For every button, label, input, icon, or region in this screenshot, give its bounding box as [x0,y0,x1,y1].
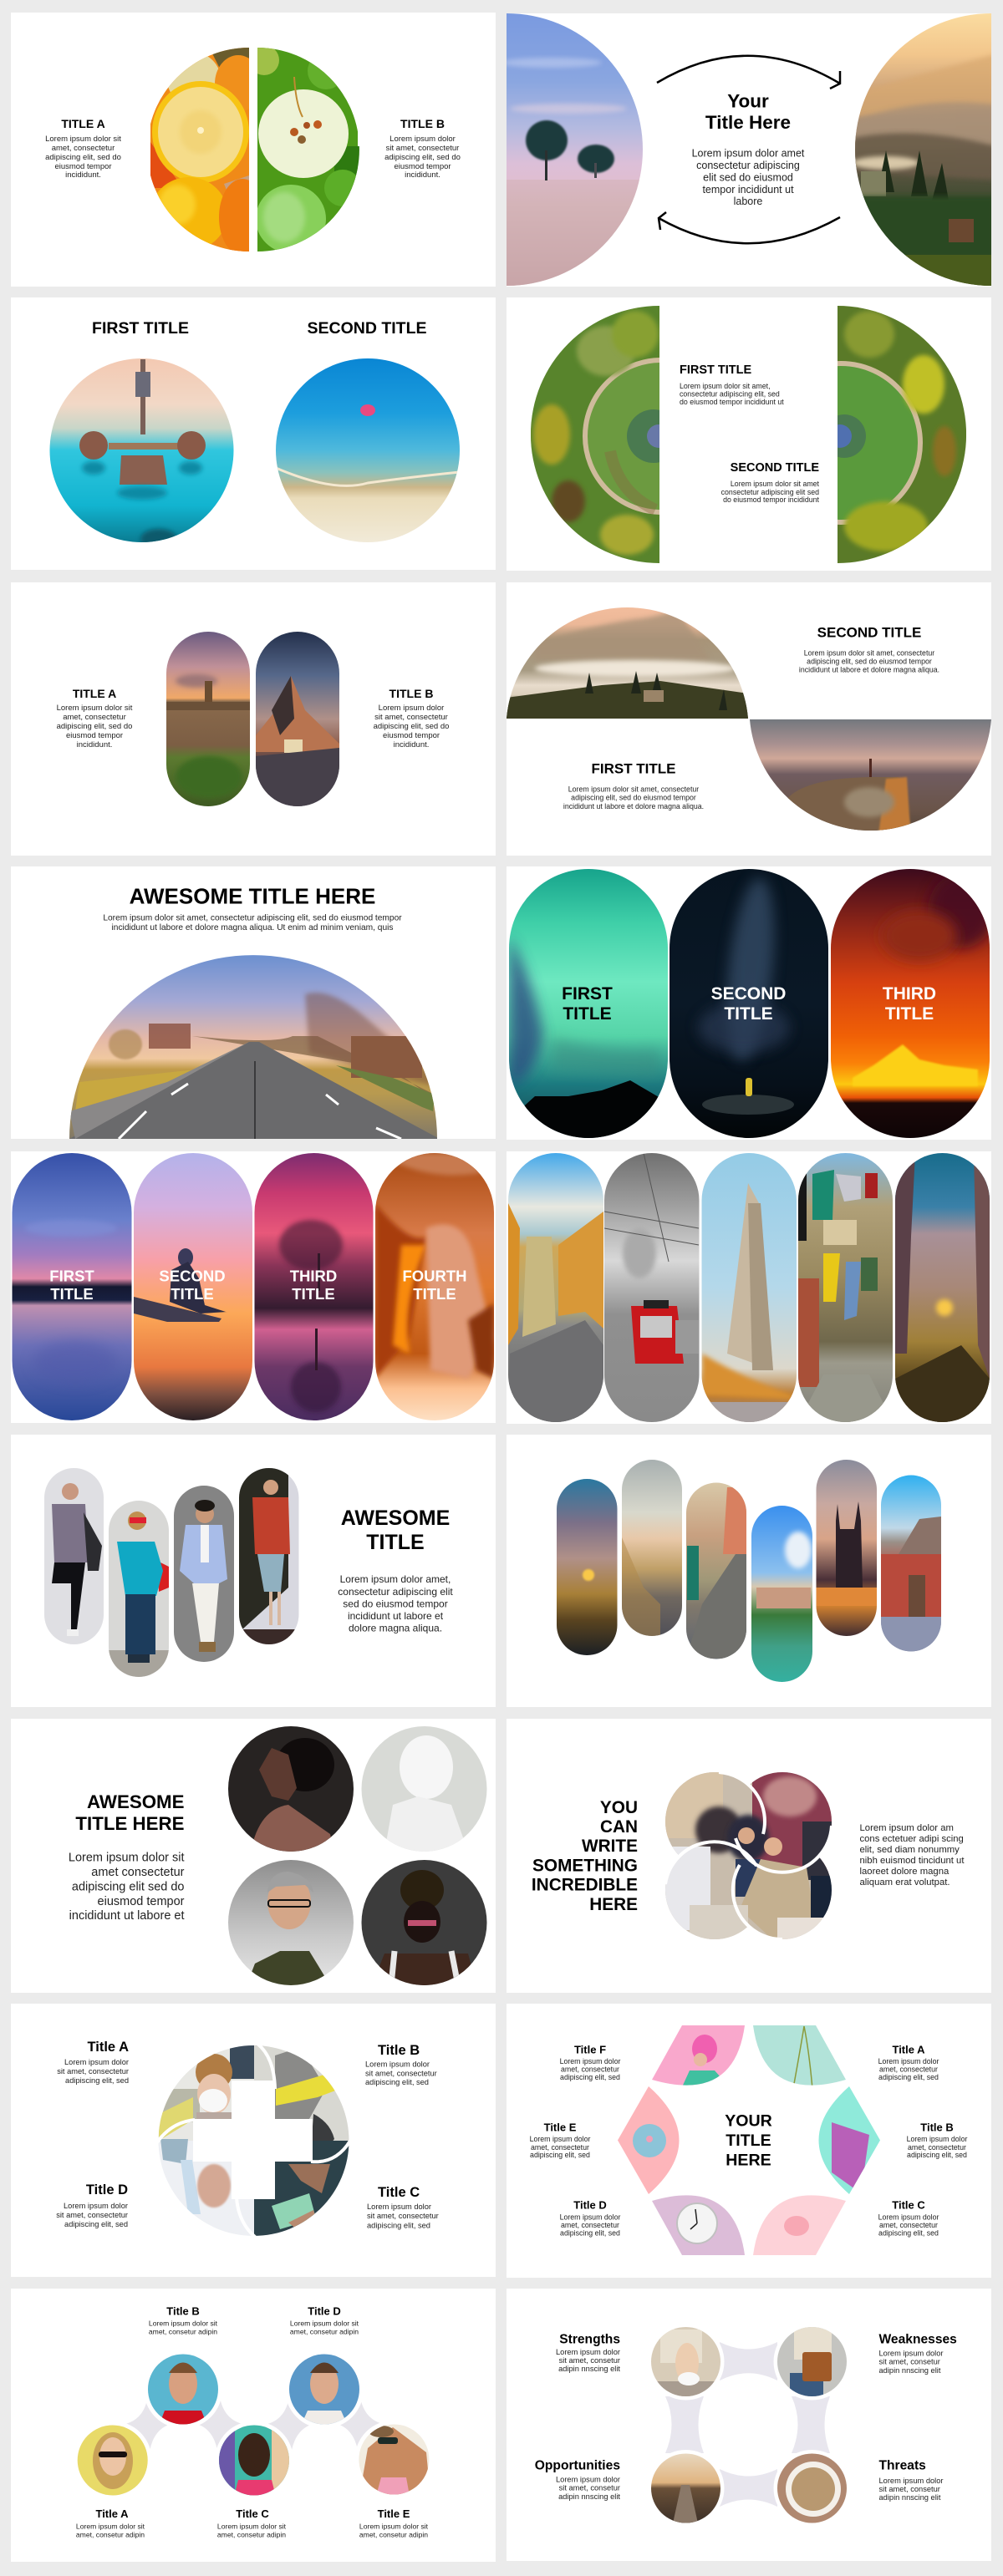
text: title A: Title A [892,2044,925,2055]
text: title B: Title B [920,2121,954,2134]
text: title A: amet, consetur adipin [76,2530,145,2538]
text: description: Lorem ipsum dolor sit amet, consectetur adipiscing elit, sed do eiusmod tempor [103,913,402,922]
text: title E: amet, consetur adipin [359,2530,428,2538]
heading: you can write something incredible here: HERE [589,1895,638,1913]
text: description: consectetur adipiscing elit [338,1586,453,1598]
text: description: amet consectetur [91,1866,185,1879]
text: weaknesses [879,2333,957,2375]
image: baby at window [650,2326,722,2398]
pill: canyon [375,1153,494,1420]
pill: cobbled street [508,1153,603,1422]
text: title A: eiusmod tempor [66,730,123,740]
heading: you can write something incredible here: WRITE [582,1837,638,1855]
text: title A: eiusmod tempor [54,162,112,170]
image: aerial park right half [838,306,966,563]
text: title D: sit amet, consectetur [56,2211,128,2219]
text: title A: amet, consectetur [52,144,115,152]
text: title A: adipiscing elit, sed [65,2076,129,2085]
text: cycle description [692,147,805,207]
text: title C: adipiscing elit, sed [878,2229,939,2238]
pill: old street [622,1460,682,1636]
heading: awesome title here: AWESOME [87,1791,184,1811]
text: second title [721,461,820,504]
panel: two beach circles [11,297,496,570]
text: title B: Lorem ipsum dolor [379,704,444,712]
image: citrus half circle [150,48,249,252]
text: title A: TITLE A [61,117,105,130]
text: title B [384,117,461,179]
text: title E [530,2121,590,2159]
heading: you can write something incredible here: YOU [600,1798,638,1816]
text: title B: Title B [166,2304,200,2318]
portrait: man B [147,2354,219,2426]
text: second title: do eiusmod tempor incididunt [723,495,820,504]
text: title D [56,2182,128,2228]
text: title C: Lorem ipsum dolor [878,2213,939,2221]
text: opportunities [535,2458,620,2501]
pill: red tram in grayscale [604,1153,699,1422]
labels: four titles [49,1267,467,1302]
text: weaknesses: Weaknesses [879,2333,957,2346]
image: coffee cup [776,2453,848,2523]
connectors: grey waisted bands [665,2342,830,2507]
decor: quadrant separators [157,2044,350,2238]
text: weaknesses: Lorem ipsum dolor [879,2350,943,2358]
panel: people pills [11,1435,496,1707]
heading: your title here: Title Here [705,112,791,132]
text: title B: Lorem ipsum dolor sit [149,2319,218,2328]
text: title B: Lorem ipsum dolor [365,2060,430,2069]
image: sunset lookout bowl [750,719,992,841]
text: cycle description: tempor incididunt ut [702,184,794,196]
heading: your title here: TITLE [726,2131,771,2150]
text: description: Lorem ipsum dolor sit [69,1852,184,1865]
text: title E: Lorem ipsum dolor [530,2135,590,2143]
heading: your title here: YOUR [725,2112,772,2131]
text: title B: adipiscing elit, sed [907,2151,967,2159]
pill: sitting silhouette [134,1153,252,1420]
portrait: white hair [361,1726,487,1852]
panel: four overlapping circles [507,1719,991,1993]
icon: white medical cross [193,2081,313,2199]
text: title F: adipiscing elit, sed [560,2073,620,2081]
text: title A: Title A [95,2507,129,2520]
image: four quadrants with white cross [158,2045,350,2237]
text: threats: adipin nnscing elit [879,2493,941,2502]
pill: flatiron [702,1153,797,1423]
text: title D: amet, consectetur [561,2221,619,2229]
text: title D: adipiscing elit, sed [64,2220,128,2228]
text: title A: Lorem ipsum dolor sit [76,2522,145,2530]
pill: aurora [509,869,669,1140]
text: title B: amet, consetur adipin [149,2328,217,2336]
text: title A: Lorem ipsum dolor sit [57,704,133,712]
text: title D: Title D [308,2304,341,2318]
rings: white halos [74,2350,433,2500]
text: title B: Lorem ipsum dolor [389,134,456,144]
text: title A [45,117,121,179]
text: description: incididunt ut labore et dolore magna aliqua. Ut enim ad minim veniam, quis [112,922,393,932]
text: title C: amet, consectetur [879,2221,938,2229]
text: second title: adipiscing elit, sed do eiusmod tempor [807,657,932,665]
panel: medical cross circle [11,2004,496,2277]
decor: white interlocking arcs [665,1772,832,1939]
text: title B: incididunt. [405,170,440,179]
panel: four pills [11,1151,496,1423]
arrow: top arc [657,56,840,89]
portrait: man D [288,2354,360,2426]
text: title E: amet, consectetur [531,2143,589,2152]
text: title D: Lorem ipsum dolor sit [290,2319,359,2328]
text: strengths: adipin nnscing elit [558,2365,620,2373]
text: title A [57,687,133,749]
heading: your title here: Your [727,90,769,111]
label: first title: TITLE [563,1004,612,1023]
panel: zigzag of portraits [11,2289,496,2562]
portrait: man with dreadlocks [361,1860,487,1985]
text: threats: sit amet, consetur [879,2485,940,2493]
text: title B: eiusmod tempor [383,730,440,740]
text: title B [149,2304,218,2336]
text: description: adipiscing elit sed do [72,1880,184,1893]
text: first title: do eiusmod tempor incididunt ut [680,398,784,406]
text: first title: Lorem ipsum dolor sit amet, [680,382,771,390]
text: first title: FIRST TITLE [591,760,676,777]
text: title B: TITLE B [400,117,445,130]
text: second title: SECOND TITLE [817,625,921,640]
heading: your title here [705,90,791,132]
image: misty field with trees [502,13,644,287]
text: title A: adipiscing elit, sed [878,2073,939,2081]
image: foggy hills dome [507,597,749,719]
text: title C: amet, consetur adipin [217,2530,286,2538]
text: first title: Lorem ipsum dolor sit amet, consectetur [568,785,699,794]
pill: tree reflection [254,1153,373,1420]
text: opportunities: Opportunities [535,2458,620,2473]
text: title B: sit amet, consectetur [365,2069,437,2077]
petal: lollipop plate [614,2081,685,2197]
pill: evening street [895,1153,990,1422]
panel: hexagon of petals [507,2004,991,2278]
text: title B: adipiscing elit, sed [365,2078,429,2086]
text: opportunities: Lorem ipsum dolor [556,2475,620,2483]
panel: cycle between two landscapes [502,13,995,288]
text: title B: sit amet, consectetur [386,144,459,152]
text: title A: incididunt. [65,170,101,179]
text: title A: Lorem ipsum dolor [64,2058,129,2066]
heading: you can write something incredible here: SOMETHING [532,1856,638,1875]
petal: building [815,2081,886,2197]
pill: venice [751,1506,812,1682]
text: title C: Title C [892,2199,925,2211]
text: strengths: Strengths [559,2333,620,2346]
text: threats: Lorem ipsum dolor [879,2477,943,2485]
text: threats [879,2458,943,2502]
text: second title: SECOND TITLE [731,461,819,475]
text: title D: Lorem ipsum dolor [560,2213,620,2221]
text: title D [290,2304,359,2336]
text: title A: sit amet, consectetur [57,2067,129,2076]
pill: lake dusk [12,1153,132,1420]
text: title B: TITLE B [389,687,433,700]
rings: white halos [647,2323,851,2527]
text: title D [560,2199,620,2238]
text: title D: adipiscing elit, sed [560,2229,620,2238]
text: weaknesses: sit amet, consetur [879,2358,940,2366]
labels: four titles: TITLE [171,1285,214,1302]
pill: lava [831,869,995,1138]
text: cycle description: consectetur adipiscing [696,160,800,171]
panel: split park aerial [507,297,991,571]
text: opportunities: sit amet, consetur [559,2483,620,2492]
text: description: sed do eiusmod tempor [343,1598,448,1609]
heading: first title: FIRST TITLE [92,319,189,338]
labels: four titles: TITLE [50,1285,94,1302]
text: description: Lorem ipsum dolor am [859,1823,954,1833]
panel: citrus and apple half circles [11,13,496,287]
image: man with leather bag [776,2326,848,2398]
text: strengths [556,2333,620,2373]
portrait: man C [218,2425,292,2497]
pill: milky way night [670,869,828,1138]
text: title B: sit amet, consectetur [374,712,448,722]
text: cycle description: labore [734,196,762,207]
text: title A: amet, consectetur [63,712,126,722]
heading: awesome title here: AWESOME TITLE HERE [130,884,375,909]
portrait: man with glasses [228,1860,354,1985]
text: title B [907,2121,967,2159]
labels: four titles: FIRST [49,1267,94,1284]
text: second title: Lorem ipsum dolor sit amet, consectetur [804,648,934,657]
text: title B: Lorem ipsum dolor [907,2135,967,2143]
text: title E: adipiscing elit, sed [530,2151,590,2159]
pill: man with backpack [44,1468,104,1644]
connectors: grey stars [125,2390,383,2463]
text: title F: Title F [574,2044,606,2055]
text: description [103,913,402,932]
heading: you can write something incredible here: INCREDIBLE [532,1875,638,1894]
text: title A: Title A [87,2040,129,2055]
text: title A [57,2040,129,2085]
text: threats: Threats [879,2458,926,2473]
text: title E: Title E [544,2121,577,2134]
labels: four titles: TITLE [292,1285,335,1302]
text: first title [680,363,784,406]
heading: your title here: HERE [726,2151,771,2169]
text: title E: Lorem ipsum dolor sit [359,2522,429,2530]
pill: laundry alley [798,1153,893,1422]
pill: stairs [686,1482,746,1659]
text: title C: Title C [378,2185,420,2200]
panel: three pills [507,866,995,1140]
text: title B [365,2043,437,2086]
text: title D: Lorem ipsum dolor [64,2202,128,2210]
text: title B [374,687,449,749]
text: title C: sit amet, consectetur [367,2212,439,2220]
portrait: woman in profile [228,1726,354,1852]
labels: four titles: SECOND [159,1267,226,1284]
label: third title: TITLE [885,1004,934,1023]
image: railway at sunset [650,2453,722,2523]
text: title C [367,2185,439,2229]
panel: road dome [11,866,496,1140]
text: title C [878,2199,939,2238]
panel: two pill landscapes [11,582,496,856]
heading: awesome title: TITLE [366,1531,425,1554]
text: title A: Lorem ipsum dolor sit [45,134,121,144]
heading: awesome title: AWESOME [341,1506,450,1530]
text: title B: adipiscing elit, sed do [374,722,449,730]
text: cycle description: Lorem ipsum dolor amet [692,147,805,159]
petal: clock [648,2172,748,2260]
text: first title: consectetur adipiscing elit, sed [680,389,780,398]
text: title C: Title C [236,2507,269,2520]
text: description: dolore magna aliqua. [349,1623,442,1634]
text: title C: Lorem ipsum dolor sit [217,2522,287,2530]
text: weaknesses: adipin nnscing elit [879,2366,941,2375]
pill: evening street [557,1479,617,1655]
text: description: incididunt ut labore et [348,1610,444,1622]
pill: man in blue blazer [174,1486,234,1662]
text: title A: Lorem ipsum dolor [878,2057,939,2065]
text: title F [560,2044,620,2081]
labels: four titles: TITLE [413,1285,456,1302]
text: first title: incididunt ut labore et dolore magna aliqua. [563,802,704,810]
text: title A: TITLE A [73,687,116,700]
text: second title: incididunt ut labore et dolore magna aliqua. [799,665,939,673]
text: title D: Title D [573,2199,607,2211]
text: title F: amet, consectetur [561,2065,619,2074]
heading: second title: SECOND TITLE [307,319,427,338]
pill: woman in red sweater [239,1468,299,1644]
image: town on rock at sunset [166,632,250,806]
text: description: aliquam erat volutpat. [859,1877,950,1888]
labels: four titles: FOURTH [402,1267,467,1284]
text: description: eiusmod tempor [98,1895,185,1908]
image: green apple half circle [257,48,359,252]
text: title A: incididunt. [77,740,112,749]
panel: five city pills [507,1151,991,1424]
text: title B: adipiscing elit, sed do [384,152,461,162]
panel: two half circles [507,582,992,856]
petal: lips [748,2172,848,2260]
text: first title: adipiscing elit, sed do eiusmod tempor [571,794,696,802]
text: title D: amet, consetur adipin [290,2328,359,2336]
pill: prague cathedral [816,1460,878,1636]
arrow: bottom arc [659,212,840,243]
text: description: incididunt ut labore et [69,1909,184,1923]
text: description: nibh euismod tincidunt ut [859,1856,965,1866]
image: swimmer over blue sea and beach [276,358,460,542]
heading: you can write something incredible here: CAN [600,1816,638,1837]
label: first title: FIRST [562,984,613,1003]
text: strengths: Lorem ipsum dolor [556,2348,620,2356]
text: title A [76,2507,145,2538]
text: title E: Title E [378,2507,410,2520]
label: third title: THIRD [883,984,936,1003]
text: cycle description: elit sed do eiusmod [703,172,793,184]
portrait: woman A [77,2425,149,2497]
text: first title [563,760,704,810]
labels: four titles: THIRD [290,1267,337,1284]
text: title A [878,2044,939,2081]
text: second title: Lorem ipsum dolor sit amet [731,480,820,488]
text: second title [799,625,939,673]
text: title B: eiusmod tempor [394,162,451,170]
text: title C: Lorem ipsum dolor [367,2203,431,2211]
pill: boy with cape [109,1501,169,1677]
portrait: woman E [359,2424,430,2496]
text: title E [359,2507,429,2538]
petal: pink-haired girl [648,2022,748,2106]
text: title F: Lorem ipsum dolor [560,2057,620,2065]
text: title A: adipiscing elit, sed do [45,152,121,162]
image: pier over turquoise water [49,358,234,549]
text: title C: adipiscing elit, sed [367,2221,430,2229]
text: second title: consectetur adipiscing elit sed [721,488,819,496]
text: opportunities: adipin nnscing elit [558,2492,620,2501]
text: title A: adipiscing elit, sed do [57,722,132,730]
text: title D: Title D [86,2182,128,2197]
text: title A: amet, consectetur [879,2065,938,2074]
panel: staggered city pills [507,1435,991,1707]
pill: red house [881,1476,941,1652]
text: first title: FIRST TITLE [680,363,752,377]
petal: cherries [748,2022,848,2111]
image: mountain peak [256,632,339,806]
text: strengths: sit amet, consetur [559,2356,620,2365]
text: title B: incididunt. [394,740,429,749]
image: aerial park left half [531,306,659,563]
image: team around a laptop [664,1771,836,1943]
text: title B: Title B [378,2043,420,2058]
text: description: cons ectetuer adipi scing [859,1834,964,1844]
label: second title: TITLE [724,1004,773,1023]
panel: four portraits [11,1719,496,1993]
text: title B: amet, consectetur [908,2143,966,2152]
label: second title: SECOND [711,984,786,1003]
text: description: Lorem ipsum dolor amet, [340,1573,451,1585]
image: tuscany hills [853,13,995,288]
text: description: elit, sed diam nonummy [859,1845,960,1855]
text: description: laoreet dolore magna [859,1867,950,1877]
image: country road at sunset [67,955,451,1140]
text: title C [217,2507,287,2538]
heading: awesome title here: TITLE HERE [75,1813,184,1833]
panel: SWOT ring [507,2289,991,2561]
